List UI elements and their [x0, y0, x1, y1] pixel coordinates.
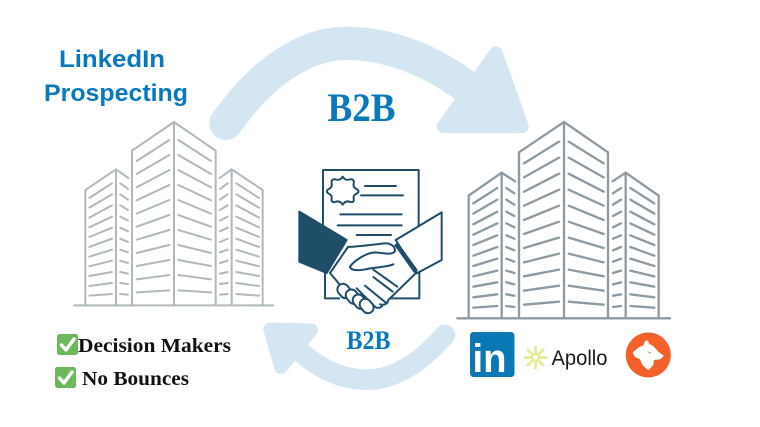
icon: LinkedIn logo: in — [472, 337, 506, 381]
top curved arrow — [226, 43, 522, 126]
heading: LinkedIn Prospecting: LinkedIn — [59, 46, 165, 73]
left building group — [74, 122, 273, 305]
text: No Bounces: No Bounces — [82, 368, 189, 390]
small B2B label: B2B — [346, 325, 390, 355]
heading: LinkedIn Prospecting: Prospecting — [44, 80, 188, 107]
bottom curved arrow — [270, 329, 445, 380]
right building group — [457, 122, 670, 318]
large B2B label: B2B — [328, 85, 396, 130]
icon: contract and handshake — [299, 170, 442, 316]
icon: Apollo logo: Apollo — [552, 347, 608, 370]
shaking hands — [299, 212, 442, 316]
heading: LinkedIn Prospecting — [44, 46, 188, 107]
checklist — [55, 334, 231, 390]
contract document — [323, 170, 419, 235]
icon: check 2 — [55, 367, 76, 388]
icon: Apollo logo — [525, 347, 608, 370]
icon: Hunter fox logo — [626, 332, 671, 378]
icon: check 1 — [57, 334, 78, 355]
text: Decision Makers: Decision Makers — [78, 335, 231, 357]
